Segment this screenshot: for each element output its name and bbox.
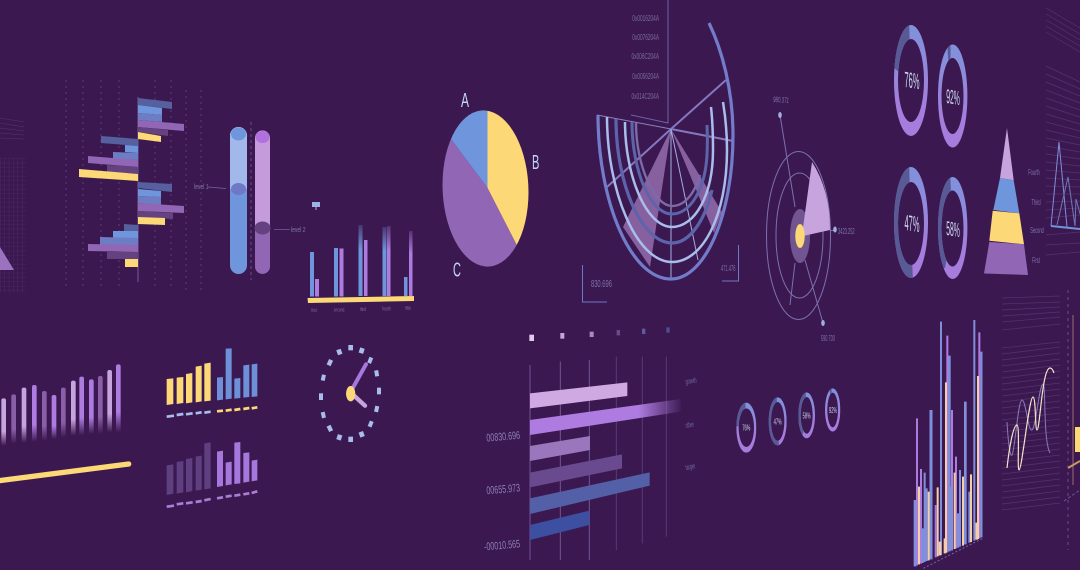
- donut 58%: 58%: [946, 218, 960, 242]
- label: level 2: [274, 226, 306, 234]
- cream wave: [1007, 368, 1054, 470]
- callout labels: [773, 96, 855, 344]
- pyramid labels: First: [1032, 257, 1040, 266]
- cylinder: level 2: [254, 130, 270, 274]
- triangle fragment: [0, 247, 14, 270]
- legend squares: [529, 327, 670, 341]
- wedges: [623, 129, 671, 267]
- yellow baseline: [308, 296, 414, 303]
- axis labels: first: [311, 307, 317, 313]
- panel: faded vertical bar chart: [0, 364, 129, 481]
- pyramid labels: Third: [1031, 199, 1041, 208]
- arcs: [598, 23, 733, 279]
- series labels: target: [685, 463, 696, 473]
- pie labels: [453, 90, 539, 281]
- panel: dense perspective bar chart: [915, 320, 984, 568]
- panel: polar arc chart: [582, 0, 738, 302]
- panel: small grouped bar chart: [308, 202, 414, 313]
- value bracket: 471.476: [721, 245, 738, 281]
- panel: wave line chart: [1002, 296, 1060, 510]
- peach bars: [919, 376, 978, 564]
- panel: clock gauge: [319, 345, 381, 442]
- pie labels: B: [532, 152, 539, 174]
- label: level 1: level 1: [194, 183, 209, 191]
- hex list: 0x014C204A: [632, 93, 659, 101]
- value bracket: 471.476: 471.476: [721, 265, 736, 274]
- value labels: 00830.696: [486, 429, 521, 444]
- label: level 2: level 2: [291, 226, 306, 234]
- axis labels: [311, 305, 411, 313]
- cylinder: level 1: [230, 127, 247, 274]
- yellow trend line: [0, 464, 129, 481]
- panel: small donut gauges: [735, 387, 842, 454]
- dim wave: [1007, 384, 1050, 455]
- callout labels: 3423.252: [838, 228, 855, 237]
- value bracket: 830.696: [582, 265, 612, 302]
- donut 92%: 92%: [946, 86, 960, 110]
- value bracket: 830.696: 830.696: [591, 278, 612, 289]
- donut 76%: [894, 25, 928, 136]
- pie labels: A: [461, 90, 469, 112]
- small donut 58%: 58%: [803, 412, 811, 421]
- slice A: [451, 110, 488, 188]
- donut 47%: [894, 167, 928, 278]
- hex list: [632, 0, 659, 101]
- axis labels: fifth: [405, 305, 411, 311]
- callout labels: 590.700: [821, 335, 835, 344]
- small donut 76%: 76%: [742, 424, 751, 433]
- panel: purple mini bars: [167, 442, 257, 507]
- dashed ring: [319, 345, 381, 442]
- radial spokes: [607, 80, 733, 187]
- series labels: other: [685, 422, 695, 431]
- small donut 47%: 47%: [774, 418, 782, 427]
- panel: pyramid chart: [984, 128, 1044, 275]
- slice B: [488, 110, 528, 245]
- clock hands: [352, 364, 366, 390]
- centre dot: [795, 224, 805, 248]
- panel: large donut gauges: [894, 25, 968, 279]
- pyramid labels: [1028, 169, 1044, 266]
- donut 47%: 47%: [905, 211, 920, 238]
- purple back bars: [917, 332, 979, 565]
- panel: left edge grid with triangle: [0, 118, 26, 293]
- panel: butterfly bar chart: [66, 80, 201, 290]
- series labels: [685, 377, 697, 473]
- panel: pie chart: [442, 93, 539, 276]
- pyramid labels: Second: [1030, 227, 1044, 236]
- small donut 92%: 92%: [829, 407, 837, 416]
- axis labels: third: [360, 306, 367, 312]
- axis labels: second: [334, 307, 345, 313]
- hex list: 0x006C204A: [632, 53, 659, 61]
- wedge: [802, 162, 830, 236]
- panel: right edge line chart: [1046, 8, 1080, 255]
- donut 76%: 76%: [905, 68, 920, 95]
- panel: horizontal bar chart: [484, 327, 697, 560]
- panel: right edge dotted axis and yellow block: [1064, 290, 1080, 550]
- slice C: [442, 139, 516, 267]
- dashed base line: [923, 538, 984, 568]
- axis labels: fourth: [382, 306, 391, 312]
- flag marker: [312, 202, 320, 210]
- pyramid labels: Fourth: [1028, 169, 1040, 178]
- donut 58%: [938, 177, 968, 279]
- callout labels: 980.371: [773, 96, 790, 106]
- value labels: [484, 429, 521, 553]
- panel: cylinder levels: [194, 122, 306, 280]
- value labels: 00655.973: [486, 482, 521, 497]
- panel: yellow and blue mini bars: [167, 348, 257, 417]
- blue bars: [915, 320, 981, 566]
- hex list: 0x0056204A: [632, 73, 659, 81]
- series labels: growth: [685, 377, 697, 387]
- value labels: -00010.565: [484, 538, 521, 553]
- pie labels: C: [453, 259, 461, 281]
- donut 92%: [938, 44, 968, 148]
- hex list: 0x0016204A: [632, 15, 659, 23]
- panel: radar dial: [766, 96, 855, 344]
- callout dots: [778, 112, 837, 326]
- hex list: 0x0076204A: [632, 34, 659, 42]
- yellow bar fragment: [1075, 427, 1080, 452]
- label: level 1: [194, 183, 226, 191]
- clock centre: [346, 386, 355, 401]
